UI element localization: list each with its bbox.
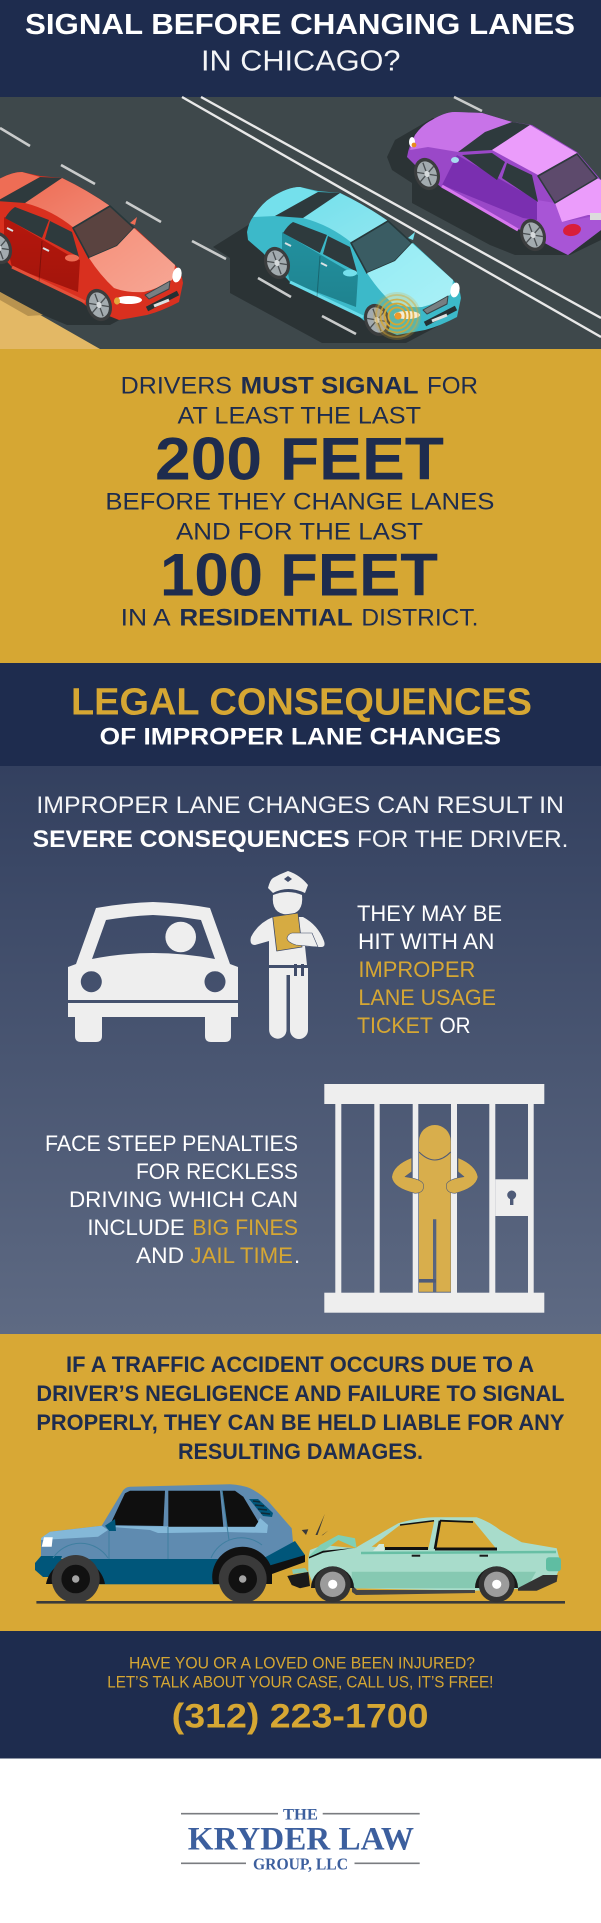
icon: impact marks xyxy=(302,1514,328,1536)
lane markings xyxy=(0,97,601,337)
line: drivers must signal for: MUST SIGNAL xyxy=(241,372,418,399)
text: improper lane usage ticket: HIT WITH AN xyxy=(358,929,494,954)
text: improper lane usage ticket xyxy=(357,901,502,1038)
sedan body xyxy=(308,1517,561,1591)
icon: police officer xyxy=(250,871,325,1039)
sedan rear light xyxy=(546,1557,561,1571)
gold background xyxy=(0,1334,601,1631)
liability text xyxy=(36,1352,565,1464)
sedan windows xyxy=(372,1521,497,1549)
suv vent xyxy=(249,1499,273,1517)
icon: jail cell with prisoner xyxy=(324,1084,544,1313)
purple car xyxy=(407,112,601,255)
stat: 200 feet: 200 FEET xyxy=(155,426,444,492)
line: in a residential district: RESIDENTIAL xyxy=(179,605,353,632)
line: in a residential district: DISTRICT. xyxy=(361,605,478,632)
panel: call to action xyxy=(0,1631,601,1758)
logo kryder law: KRYDER LAW xyxy=(188,1821,414,1857)
teal car xyxy=(247,187,461,340)
line: before they change lanes: BEFORE THEY CHANGE LANES xyxy=(105,488,494,515)
sedan mirror and handles xyxy=(373,1544,384,1551)
text: reckless driving penalties: INCLUDE xyxy=(87,1215,185,1240)
text: reckless driving penalties: FOR RECKLESS xyxy=(136,1159,298,1184)
suv mirror xyxy=(105,1519,116,1531)
gradient background xyxy=(0,766,601,1334)
navy background xyxy=(0,663,601,766)
blue SUV xyxy=(35,1484,305,1603)
cta line two: LET’S TALK ABOUT YOUR CASE, CALL US, IT’S FREE! xyxy=(107,1673,493,1692)
text: improper lane usage ticket: THEY MAY BE xyxy=(357,901,502,926)
officer head xyxy=(273,892,302,914)
suv rear black trim xyxy=(268,1555,305,1574)
phone number: (312) 223-1700 xyxy=(172,1698,428,1736)
suv headlight xyxy=(42,1537,53,1547)
red car amber light xyxy=(114,297,120,305)
prisoner xyxy=(392,1125,478,1292)
road surface xyxy=(0,97,601,349)
lane dashes over shadow xyxy=(258,278,356,334)
logo the: THE xyxy=(283,1806,318,1823)
stat: 100 feet: 100 FEET xyxy=(160,542,438,609)
line: drivers must signal for: FOR xyxy=(427,372,478,399)
suv upper body xyxy=(41,1484,293,1560)
suv wheels xyxy=(46,1559,105,1584)
line: in a residential district xyxy=(121,605,478,632)
heading gold: LEGAL CONSEQUENCES xyxy=(71,681,532,723)
line: drivers must signal for: DRIVERS xyxy=(121,372,232,399)
suv door seams xyxy=(53,1490,262,1559)
text: reckless driving penalties: . xyxy=(294,1243,300,1268)
line: in a residential district: IN A xyxy=(121,605,171,632)
icon: car front with driver xyxy=(68,902,238,1042)
sedan stripe xyxy=(361,1552,556,1553)
shoulder shadow band xyxy=(0,292,43,316)
clipboard xyxy=(273,913,302,951)
officer torso and arms xyxy=(250,917,325,965)
holster xyxy=(294,964,304,976)
text: improper lane usage ticket: TICKET xyxy=(357,1013,433,1038)
officer legs xyxy=(269,968,308,1039)
intro text line two xyxy=(33,826,568,853)
text: reckless driving penalties xyxy=(45,1131,300,1268)
intro text line two: FOR THE DRIVER. xyxy=(357,826,568,853)
logo group llc: GROUP, LLC xyxy=(253,1854,348,1873)
line: drivers must signal for xyxy=(121,372,478,399)
sedan wheels xyxy=(311,1566,354,1588)
officer hand xyxy=(287,933,318,947)
panel: consequences xyxy=(0,766,601,1334)
panel: road scene xyxy=(0,97,601,349)
mint sedan xyxy=(287,1517,561,1602)
intro text line two: SEVERE CONSEQUENCES xyxy=(33,826,350,853)
car shadows xyxy=(0,118,601,343)
header panel xyxy=(0,0,601,98)
crumpled hood xyxy=(308,1535,357,1557)
logo rules xyxy=(181,1814,420,1863)
panel: legal consequences heading xyxy=(0,663,601,766)
panel: liability xyxy=(0,1334,601,1631)
suv lower body xyxy=(35,1541,305,1584)
liability text: RESULTING DAMAGES. xyxy=(178,1439,423,1464)
suv hood and belt highlight xyxy=(41,1518,268,1540)
cell bars xyxy=(324,1084,544,1313)
text: reckless driving penalties: AND xyxy=(136,1243,184,1268)
sedan bumper xyxy=(287,1572,310,1588)
text: reckless driving penalties: DRIVING WHICH CAN xyxy=(69,1187,298,1212)
navy background xyxy=(0,1631,601,1758)
text: improper lane usage ticket: IMPROPER xyxy=(358,957,475,982)
liability text: DRIVER’S NEGLIGENCE AND FAILURE TO SIGNAL xyxy=(36,1381,565,1406)
logo: the kryder law group xyxy=(181,1806,420,1873)
text: improper lane usage ticket: LANE USAGE xyxy=(358,985,496,1010)
road shoulder sand xyxy=(0,292,100,349)
liability text: IF A TRAFFIC ACCIDENT OCCURS DUE TO A xyxy=(66,1352,534,1377)
ground line xyxy=(36,1601,565,1604)
panel: signal distance rules xyxy=(0,349,601,663)
header background xyxy=(0,0,601,98)
title line two: IN CHICAGO? xyxy=(201,46,400,78)
red car xyxy=(0,172,183,325)
turn signal rings xyxy=(373,292,421,340)
liability text: PROPERLY, THEY CAN BE HELD LIABLE FOR ANY xyxy=(36,1410,565,1435)
gold background xyxy=(0,349,601,663)
text: reckless driving penalties: BIG FINES xyxy=(192,1215,298,1240)
title line one: SIGNAL BEFORE CHANGING LANES xyxy=(25,9,575,41)
suv windows xyxy=(110,1491,258,1527)
sedan underbody xyxy=(352,1585,475,1595)
cta line one: HAVE YOU OR A LOVED ONE BEEN INJURED? xyxy=(129,1653,475,1672)
intro text line one: IMPROPER LANE CHANGES CAN RESULT IN xyxy=(36,792,564,819)
text: improper lane usage ticket: OR xyxy=(440,1013,471,1038)
line: at least the last: AT LEAST THE LAST xyxy=(178,402,421,429)
officer cap xyxy=(268,871,308,893)
text: reckless driving penalties: FACE STEEP PENALTIES xyxy=(45,1131,298,1156)
line: and for the last: AND FOR THE LAST xyxy=(176,518,423,545)
text: reckless driving penalties: JAIL TIME xyxy=(190,1243,293,1268)
keyhole xyxy=(507,1190,516,1205)
subheading white: OF IMPROPER LANE CHANGES xyxy=(100,724,501,750)
